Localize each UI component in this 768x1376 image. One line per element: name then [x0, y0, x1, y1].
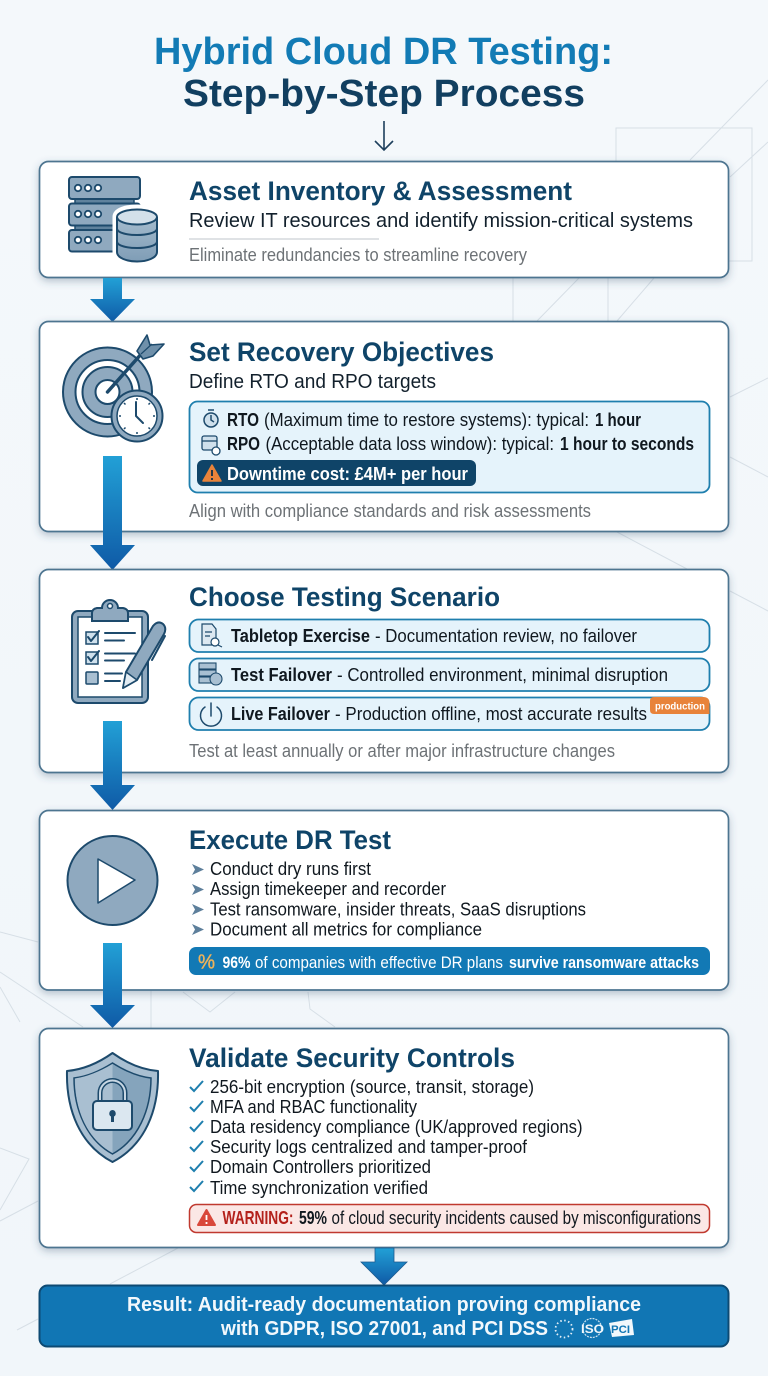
callout: warning: WARNING: [222, 1208, 294, 1228]
text: result statement: Result: Audit-ready documentation proving compliance [127, 1294, 641, 1316]
text: RTO: RTO [227, 410, 259, 430]
badge: production: production [655, 700, 705, 712]
heading: Execute DR Test [189, 825, 391, 855]
callout: survival stat: 96% [222, 953, 250, 972]
arrow: step 2 to 3 [90, 456, 135, 570]
text: description: Define RTO and RPO targets [189, 371, 436, 393]
list: security checks: Time synchronization verified [210, 1178, 428, 1198]
option: live failover: - Production offline, most accurate results [335, 704, 647, 724]
arrow: title to first step [375, 121, 393, 150]
text: RPO: 1 hour to seconds [560, 434, 694, 454]
icon: target and clock [63, 335, 164, 442]
icon: PCI badge: PCI [611, 1324, 630, 1336]
callout: warning [190, 1204, 710, 1232]
text: note: Test at least annually or after major infrastructure changes [189, 741, 615, 761]
arrow: step 4 to 5 [90, 943, 135, 1028]
panel: recovery objectives [40, 322, 728, 532]
icon: play button [68, 836, 158, 925]
icon: clipboard and pen [72, 600, 165, 703]
text: note: Eliminate redundancies to streamline recovery [189, 245, 527, 265]
list: security checks: MFA and RBAC functionality [210, 1097, 417, 1117]
text: RTO: 1 hour [595, 410, 641, 430]
option: tabletop exercise: - Documentation review, no failover [375, 626, 637, 646]
list: security checks [190, 1077, 582, 1198]
panel: execute test [40, 810, 728, 990]
title: Hybrid Cloud DR Testing: [154, 31, 613, 73]
icon: shield and lock [67, 1053, 158, 1162]
heading: Asset Inventory & Assessment [189, 176, 572, 206]
panel: asset inventory [40, 162, 728, 278]
arrow: step 3 to 4 [90, 721, 135, 810]
icon: ISO badge: ISO [581, 1322, 604, 1336]
list: security checks: Security logs centralized and tamper-proof [210, 1137, 528, 1157]
icon: PCI badge [609, 1319, 634, 1337]
icon: ISO badge [581, 1318, 604, 1338]
panel: testing scenario [40, 570, 728, 772]
option: live failover: Live Failover [231, 704, 330, 724]
callout: RTO and RPO [190, 402, 710, 492]
arrow: step 5 to result [361, 1248, 407, 1285]
panel: security controls [40, 1028, 728, 1248]
callout: survival stat: survive ransomware attacks [509, 953, 699, 972]
text: RPO: (Acceptable data loss window): typical: [266, 434, 554, 454]
icon: percent: % [198, 952, 215, 974]
list: test steps: Conduct dry runs first [210, 859, 371, 879]
icon: power [200, 703, 221, 726]
text: RPO: RPO [227, 434, 260, 454]
badge: downtime cost: Downtime cost: £4M+ per hour [227, 464, 468, 484]
list: test steps: Assign timekeeper and recorder [210, 879, 446, 899]
text: note: Align with compliance standards and risk assessments [189, 501, 591, 521]
option: tabletop exercise: Tabletop Exercise [231, 626, 370, 646]
option: tabletop exercise [190, 620, 710, 652]
text: RPO [227, 434, 694, 454]
title: Step-by-Step Process [183, 73, 585, 115]
heading: Validate Security Controls [189, 1043, 515, 1073]
list: test steps [192, 859, 586, 940]
icon: calendar [202, 436, 220, 455]
icon: warning triangle [198, 1210, 215, 1225]
option: live failover [190, 697, 710, 730]
option: test failover [190, 658, 710, 691]
text: description: Review IT resources and identify mission-critical systems [189, 210, 693, 232]
arrow: step 1 to 2 [90, 278, 135, 322]
list: security checks: Domain Controllers prioritized [210, 1157, 431, 1177]
title [154, 31, 613, 115]
callout: survival stat: of companies with effective DR plans [255, 953, 503, 972]
icon: small servers [199, 663, 222, 685]
heading: Choose Testing Scenario [189, 582, 500, 612]
badge: production [650, 697, 710, 714]
text: RTO: (Maximum time to restore systems): typical: [264, 410, 589, 430]
option: test failover: - Controlled environment, minimal disruption [337, 665, 668, 685]
icon: document search [202, 624, 222, 647]
list: test steps: Test ransomware, insider threats, SaaS disruptions [210, 900, 586, 920]
icon: GDPR stars [556, 1320, 572, 1338]
icon: servers and database [69, 177, 157, 262]
option: test failover: Test Failover [231, 665, 332, 685]
text: result statement: with GDPR, ISO 27001, and PCI DSS [220, 1318, 548, 1340]
list: security checks: Data residency compliance (UK/approved regions) [210, 1117, 582, 1137]
list: test steps: Document all metrics for compliance [210, 920, 482, 940]
callout: survival stat [189, 947, 710, 975]
panel: result [40, 1286, 728, 1346]
badge: downtime cost [197, 460, 476, 486]
callout: warning: of cloud security incidents caused by misconfigurations [332, 1208, 701, 1228]
heading: Set Recovery Objectives [189, 337, 494, 367]
callout: warning: 59% [299, 1208, 327, 1228]
list: security checks: 256-bit encryption (source, transit, storage) [210, 1077, 534, 1097]
text: result statement [127, 1294, 641, 1340]
icon: stopwatch [204, 410, 218, 427]
